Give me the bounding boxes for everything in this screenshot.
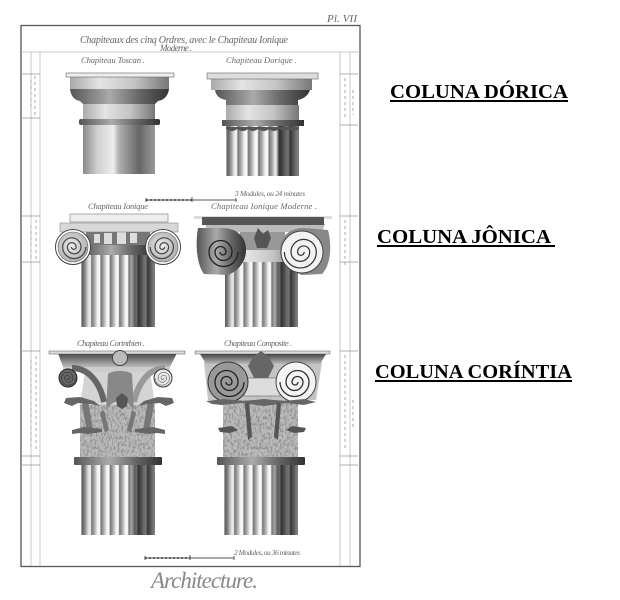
scale bar lower (145, 548, 300, 560)
scale bar upper (146, 189, 305, 202)
plate caption: Architecture. (149, 568, 258, 593)
label: Doric column: COLUNA DÓRICA (390, 79, 569, 103)
column: Modern Ionic capital (194, 201, 332, 327)
plate title: Chapiteaux des cinq Ordres, avec le Chapiteau Ionique (80, 35, 289, 46)
column: Corinthian capital (49, 338, 185, 535)
column: Composite capital (195, 338, 330, 535)
column: Composite capital: Chapiteau Composite . (224, 338, 292, 348)
column: Ionic capital: Chapiteau Ionique (88, 201, 148, 211)
column: Tuscan capital: Chapiteau Toscan . (81, 55, 145, 65)
label: Corinthian column: COLUNA CORÍNTIA (375, 360, 573, 383)
plate frame and side rules (21, 26, 360, 566)
column: Ionic capital (56, 201, 180, 327)
scale bar upper: 3 Modules, ou 24 minutes (234, 189, 305, 198)
column: Doric capital: Chapiteau Dorique . (226, 55, 297, 65)
plate number: Pl. VII (326, 13, 358, 25)
column: Modern Ionic capital: Chapiteau Ionique Moderne . (211, 201, 317, 211)
label: Ionic column: COLUNA JÔNICA (377, 224, 552, 248)
plate title (80, 35, 289, 53)
plate title: Moderne . (159, 43, 192, 53)
column: Corinthian capital: Chapiteau Corinthien . (77, 338, 145, 348)
scale bar lower: 2 Modules, ou 36 minutes (234, 548, 300, 557)
column: Tuscan capital (66, 55, 174, 174)
column: Doric capital (207, 55, 318, 176)
engraved architecture plate (21, 13, 360, 593)
